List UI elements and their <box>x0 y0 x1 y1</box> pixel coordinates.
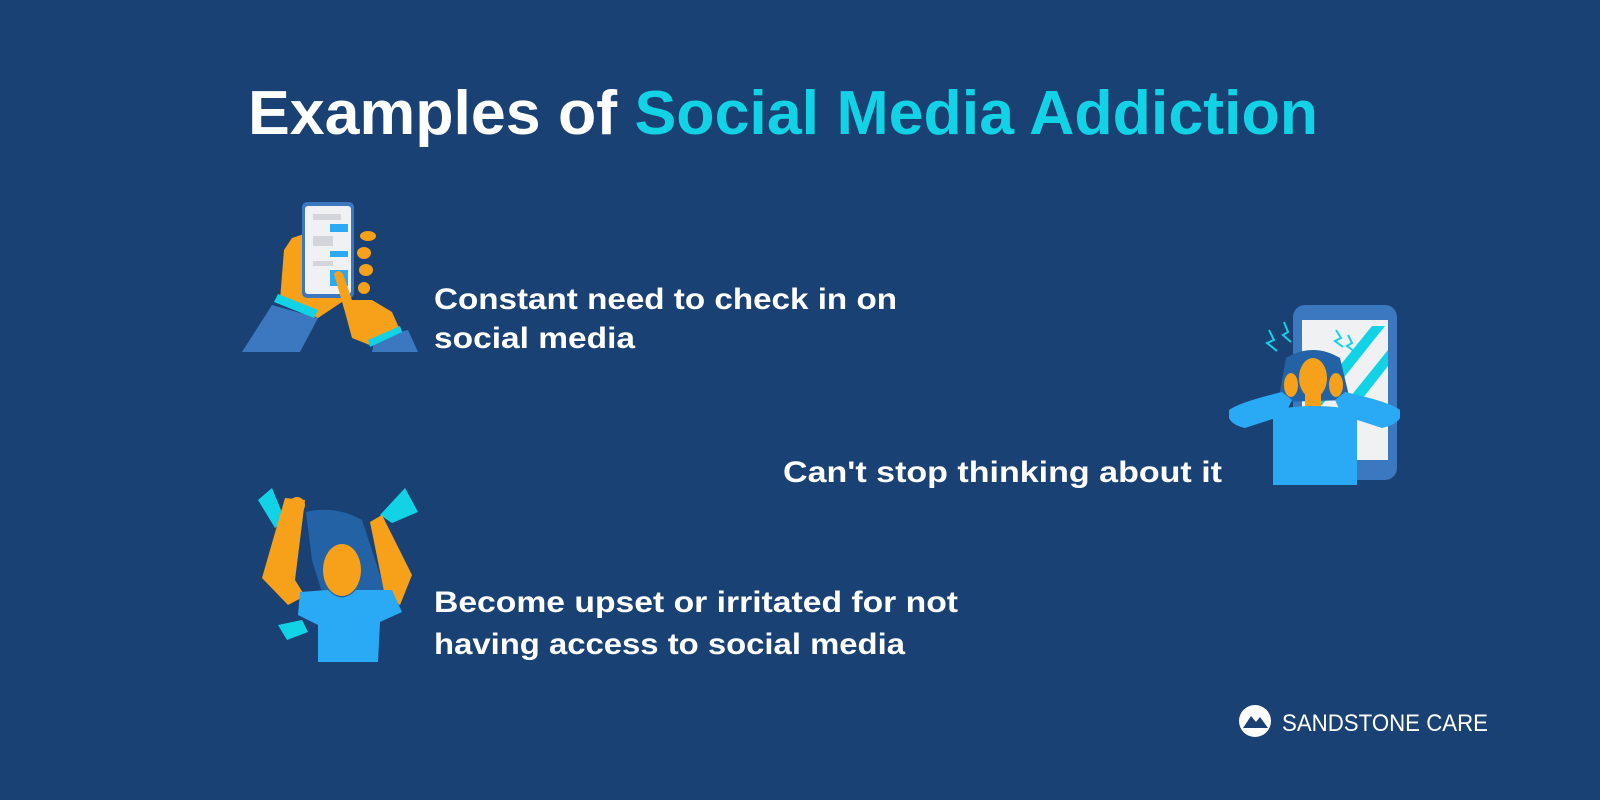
hair <box>1278 350 1350 402</box>
text: constant need: Constant need to check in on <box>434 283 897 316</box>
icon: stressed person with phone <box>1229 305 1400 485</box>
text: can't stop: Can't stop thinking about it <box>783 456 1222 489</box>
icon: hands holding phone <box>242 202 418 352</box>
title: Examples of Social Media Addiction <box>248 79 1318 148</box>
logo: Sandstone Care <box>1239 705 1488 737</box>
logo: Sandstone Care: SANDSTONE CARE <box>1282 710 1488 737</box>
text: social media: social media <box>434 322 635 355</box>
icon: upset woman <box>258 488 418 662</box>
text: having access: having access to social media <box>434 628 905 661</box>
text: become upset: Become upset or irritated for not <box>434 586 958 619</box>
